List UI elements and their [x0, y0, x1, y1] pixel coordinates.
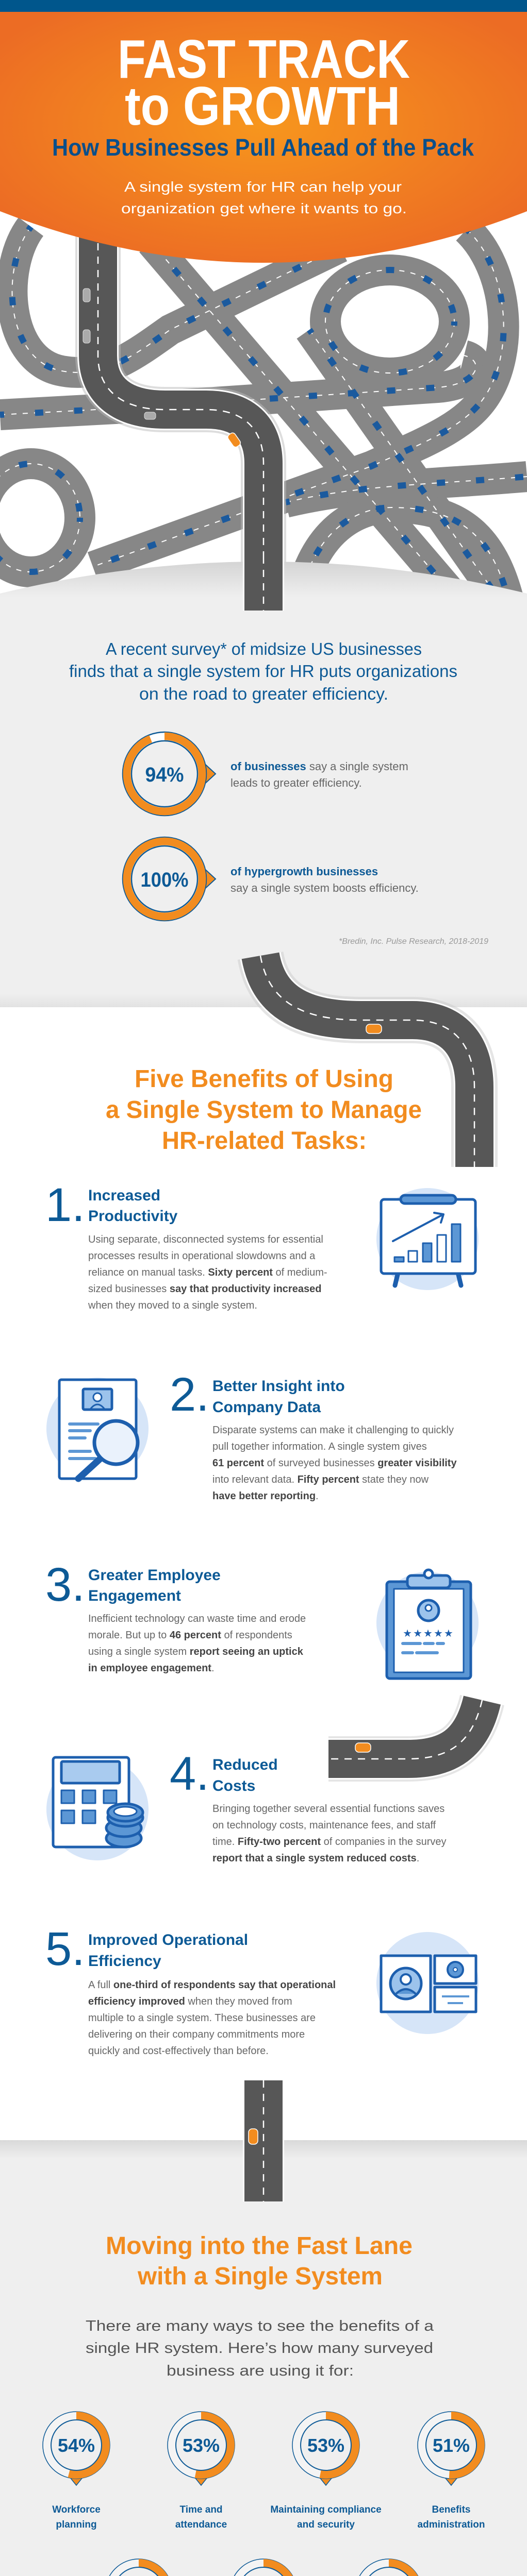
donut: time and attendance 53%: Time and — [179, 2504, 223, 2515]
heading: five benefits: HR-related Tasks: — [162, 1127, 367, 1155]
benefit 2: 61 percent of surveyed businesses greater visibility — [212, 1458, 457, 1469]
benefit 5: Efficiency — [88, 1953, 161, 1970]
benefit 3: using a single system report seeing an uptick — [88, 1646, 304, 1657]
tagline: organization get where it wants to go. — [121, 200, 407, 216]
icon: clipboard rating: ★★★★★ — [403, 1628, 454, 1639]
road: winding to benefits — [260, 956, 474, 1167]
title — [118, 29, 410, 137]
donut: benefits administration 51% — [418, 2412, 485, 2530]
stat: 94% — [123, 732, 408, 816]
donut: benefits administration 51%: administration — [418, 2519, 485, 2530]
benefit 2: Better Insight into — [212, 1378, 345, 1395]
benefit 5: delivering on their company commitments more — [88, 2029, 305, 2040]
benefit 3 — [45, 1558, 306, 1674]
dark road stub — [243, 556, 284, 611]
icon: presentation board chart — [376, 1188, 479, 1290]
tagline: A single system for HR can help your — [124, 179, 402, 195]
donut: workforce planning 54%: 54% — [58, 2435, 95, 2456]
benefit 1: processes results in operational slowdowns and a — [88, 1250, 316, 1262]
stat: 94%: leads to greater efficiency. — [230, 776, 362, 789]
donut: time and attendance 53% — [168, 2412, 235, 2530]
fast lane intro text: business are using it for: — [167, 2363, 354, 2379]
icon: profile and settings panels — [376, 1932, 479, 2034]
donut: employee skills 51% — [95, 2559, 182, 2576]
survey intro text: on the road to greater efficiency. — [139, 684, 388, 703]
road: into fast lane — [249, 2080, 264, 2201]
benefit 4 — [170, 1748, 447, 1864]
heading: moving into the fast lane — [106, 2232, 413, 2290]
heading: five benefits — [106, 1065, 422, 1155]
donut: benefits administration 51%: Benefits — [432, 2504, 470, 2515]
benefit 2 — [170, 1368, 457, 1502]
donut: compliance and security 53% — [270, 2412, 382, 2530]
benefit 4: time. Fifty-two percent of companies in the survey — [212, 1836, 447, 1848]
benefit 2: Disparate systems can make it challenging to quickly — [212, 1425, 454, 1436]
benefit 4: Bringing together several essential functions saves — [212, 1803, 444, 1815]
benefit 1: when they moved to a single system. — [88, 1300, 257, 1311]
fast lane intro text — [86, 2318, 434, 2379]
donut: workforce planning 54%: Workforce — [52, 2504, 101, 2515]
stat: 94%: 94% — [145, 764, 184, 786]
benefit 2: pull together information. A single system gives — [212, 1441, 427, 1452]
chart: usage donuts — [43, 2412, 485, 2576]
donut: compliance and security 53%: and security — [297, 2519, 355, 2530]
icon: clipboard rating — [376, 1570, 479, 1679]
heading: five benefits: Five Benefits of Using — [135, 1065, 393, 1093]
benefit 2: Company Data — [212, 1399, 321, 1416]
fast lane intro text: single HR system. Here’s how many surveyed — [86, 2340, 433, 2357]
donut: compliance and security 53%: 53% — [307, 2435, 344, 2456]
benefit 3: Engagement — [88, 1587, 181, 1604]
benefit 5: efficiency improved when they moved from — [88, 1996, 292, 2007]
benefit 4: on technology costs, maintenance fees, and staff — [212, 1820, 436, 1831]
benefit 5: 5. — [45, 1923, 85, 1975]
benefit 1: 1. — [45, 1179, 85, 1231]
benefit 4: report that a single system reduced costs. — [212, 1853, 419, 1864]
title: to GROWTH — [125, 76, 400, 137]
benefit 1: Increased — [88, 1187, 160, 1204]
benefit 2: have better reporting. — [212, 1490, 319, 1502]
benefit 3: 3. — [45, 1558, 85, 1611]
orange car — [226, 432, 242, 448]
survey intro text — [69, 639, 457, 703]
stat: 100% — [123, 837, 419, 921]
donut: workforce planning 54% — [43, 2412, 110, 2530]
donut: benefits administration 51%: 51% — [433, 2435, 470, 2456]
benefit 1: Productivity — [88, 1208, 178, 1225]
heading: five benefits: a Single System to Manage — [106, 1096, 422, 1124]
road: reduced costs curve — [328, 1700, 482, 1759]
benefit 5: A full one-third of respondents say that operational — [88, 1979, 336, 1991]
benefit 4: Reduced — [212, 1756, 278, 1773]
icon: calculator with coins — [46, 1757, 149, 1860]
panel: fast lane — [0, 2140, 527, 2576]
top roads network — [0, 227, 527, 608]
stat: 94%: of businesses say a single system — [230, 760, 408, 773]
icon: document with magnifier — [46, 1378, 149, 1480]
heading: moving into the fast lane: with a Single System — [137, 2263, 383, 2290]
main dark road (top) — [83, 216, 264, 618]
benefit 1: Using separate, disconnected systems for essential — [88, 1234, 323, 1245]
benefit 3: in employee engagement. — [88, 1663, 215, 1674]
benefit 4: 4. — [170, 1748, 209, 1800]
stat: 100%: 100% — [140, 869, 189, 891]
hero orange banner — [0, 0, 527, 263]
benefit 5: Improved Operational — [88, 1931, 248, 1948]
benefit 1: sized businesses say that productivity increased — [88, 1283, 321, 1295]
benefit 5: multiple to a single system. These businesses are — [88, 2012, 316, 2024]
benefit 3: morale. But up to 46 percent of respondents — [88, 1630, 292, 1641]
benefit 3: Inefficient technology can waste time and erode — [88, 1613, 306, 1624]
benefit 2: 2. — [170, 1368, 209, 1421]
footnote: *Bredin, Inc. Pulse Research, 2018-2019 — [339, 937, 488, 946]
survey intro text: A recent survey* of midsize US businesses — [106, 639, 422, 658]
benefit 2: into relevant data. Fifty percent state they now — [212, 1474, 429, 1485]
heading: moving into the fast lane: Moving into the Fast Lane — [106, 2232, 413, 2260]
tagline — [121, 179, 407, 216]
donut: time and attendance 53%: 53% — [183, 2435, 220, 2456]
subtitle: How Businesses Pull Ahead of the Pack — [52, 134, 474, 161]
donut: onboarding 39% — [355, 2559, 422, 2576]
fast lane intro text: There are many ways to see the benefits of a — [86, 2318, 434, 2334]
benefit 5 — [45, 1923, 336, 2057]
benefit 1 — [45, 1179, 327, 1311]
title: FAST TRACK — [118, 29, 410, 90]
donut: compliance and security 53%: Maintaining compliance — [270, 2504, 382, 2515]
stat: 100%: of hypergrowth businesses — [230, 865, 378, 878]
stat: 100%: say a single system boosts efficiency. — [230, 882, 419, 894]
benefit 3: Greater Employee — [88, 1567, 221, 1584]
donut: recruiting 46% — [230, 2559, 297, 2576]
benefit 4: Costs — [212, 1777, 255, 1794]
donut: time and attendance 53%: attendance — [175, 2519, 227, 2530]
survey intro text: finds that a single system for HR puts organizations — [69, 662, 457, 681]
benefit 5: quickly and cost-effectively than before. — [88, 2045, 269, 2057]
benefit 1: reliance on manual tasks. Sixty percent of medium- — [88, 1267, 327, 1278]
donut: workforce planning 54%: planning — [56, 2519, 97, 2530]
panel: survey — [0, 556, 527, 1007]
